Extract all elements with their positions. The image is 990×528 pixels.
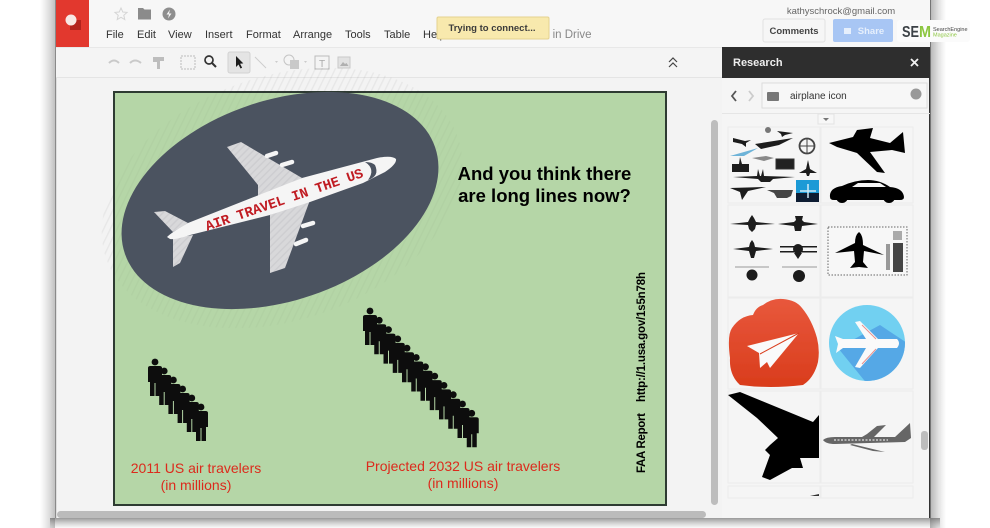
- search bar: [732, 83, 927, 108]
- scrollbars: [57, 120, 718, 518]
- thumbnail: red cloud: [729, 299, 819, 387]
- source url: http://1.usa.gov/1s5n78h: [636, 272, 648, 402]
- menu bar: Table: [384, 29, 410, 41]
- label: 2032 travelers: [366, 458, 560, 491]
- people row: 2011: [148, 359, 208, 441]
- label: 2032 travelers: (in millions): [428, 475, 498, 491]
- thumbnail: plane and car: [829, 128, 905, 203]
- account and share buttons: Comments: [769, 26, 819, 37]
- logo badge: Magazine: [933, 32, 957, 38]
- people row: 2032: [363, 308, 479, 447]
- label: 2011 travelers: [131, 460, 261, 493]
- label: 2011 travelers: 2011 US air travelers: [131, 460, 261, 476]
- cockpit: [365, 162, 376, 180]
- engines: [267, 153, 313, 244]
- menu bar: Help: [423, 29, 446, 41]
- research header: Research: [733, 57, 783, 69]
- headline: And you think there: [458, 163, 631, 184]
- thumbnail grid: [728, 127, 913, 498]
- title bar icons: [115, 8, 176, 20]
- connecting notice: [437, 17, 549, 39]
- thumbnail: large black plane: [728, 392, 819, 480]
- account and share buttons: Share: [858, 26, 884, 37]
- research panel: [722, 47, 930, 518]
- research header: [722, 47, 930, 78]
- toolbar icons: [109, 52, 677, 73]
- search bar: airplane icon: [790, 91, 847, 102]
- menu bar: Insert: [205, 29, 233, 41]
- headline: [458, 163, 631, 206]
- menu bar: Format: [246, 29, 281, 41]
- source report: FAA Report: [636, 413, 648, 473]
- thumbnail: blue circle plane: [829, 305, 905, 381]
- thumbnail: grey jet: [823, 423, 911, 452]
- logo badge: SE: [902, 24, 919, 41]
- menu bar: Arrange: [293, 29, 332, 41]
- plane badge: [92, 53, 468, 348]
- label: 2032 travelers: Projected 2032 US air travelers: [366, 458, 560, 474]
- thumbnail scrollbar: [921, 431, 928, 450]
- menu bar: [106, 29, 592, 41]
- logo badge: SearchEngine: [933, 27, 968, 33]
- label: 2011 travelers: (in millions): [161, 477, 231, 493]
- app logo: [56, 0, 89, 47]
- toolbar icons: T: [319, 59, 325, 70]
- plane title: AIR TRAVEL IN THE US: [204, 166, 366, 235]
- fuselage: [167, 157, 396, 239]
- thumbnail: airplane stamp: [828, 227, 907, 275]
- account and share buttons: kathyschrock@gmail.com: [787, 6, 895, 17]
- thumbnail: plane silhouettes: [730, 215, 818, 282]
- menu bar: Tools: [345, 29, 371, 41]
- headline: are long lines now?: [458, 185, 631, 206]
- slide canvas: [66, 22, 666, 505]
- account and share buttons: [763, 6, 895, 42]
- connecting notice: Trying to connect...: [448, 23, 536, 34]
- logo badge: [897, 20, 970, 42]
- logo badge: M: [919, 24, 931, 41]
- menu bar: File: [106, 29, 124, 41]
- thumbnail: icon collection: [730, 127, 819, 202]
- menu bar: d in Drive: [543, 29, 592, 41]
- menu bar: Edit: [137, 29, 156, 41]
- menu bar: View: [168, 29, 192, 41]
- wings and tail: [154, 142, 310, 273]
